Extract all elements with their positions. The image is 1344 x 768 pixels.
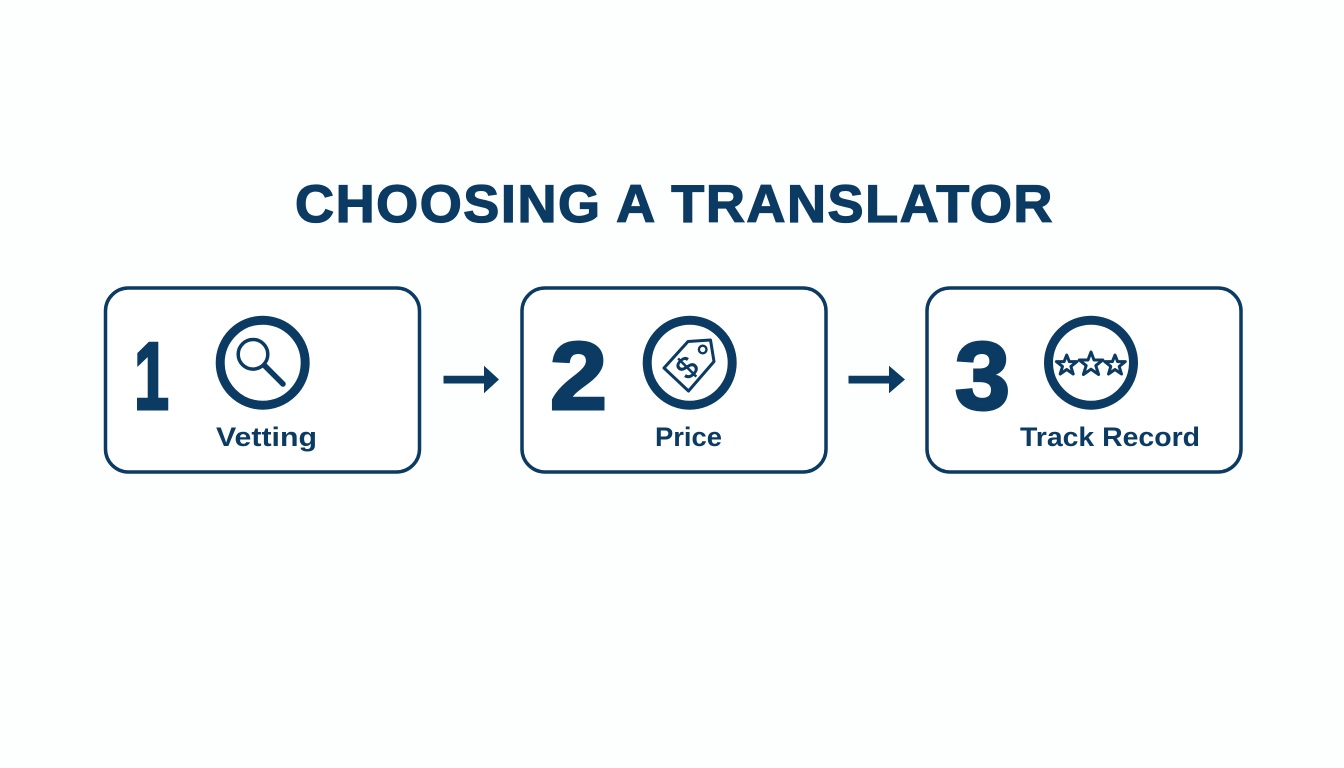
arrow: step 1 to step 2 xyxy=(444,366,499,393)
icon: magnifying glass xyxy=(220,320,305,405)
title: CHOOSING A TRANSLATOR xyxy=(295,175,1054,234)
panel: step 1 vetting xyxy=(106,288,420,472)
step number 2: 2 xyxy=(550,323,607,430)
panel frame 2 xyxy=(522,288,826,472)
icon: price tag: $ xyxy=(669,349,706,386)
arrow: step 2 to step 3 xyxy=(848,366,905,393)
icon: three stars xyxy=(1048,320,1134,405)
panel frame 1 xyxy=(106,288,420,472)
label: Track Record: Track Record xyxy=(1020,422,1200,452)
icon: price tag xyxy=(647,320,732,405)
panel frame 3 xyxy=(927,288,1241,472)
label: Price: Price xyxy=(655,422,722,452)
step number 1: 1 xyxy=(134,323,169,430)
label: Vetting: Vetting xyxy=(216,422,317,452)
panel: step 3 track record xyxy=(927,288,1241,472)
panel: step 2 price xyxy=(522,288,826,472)
step number 3: 3 xyxy=(955,323,1010,430)
